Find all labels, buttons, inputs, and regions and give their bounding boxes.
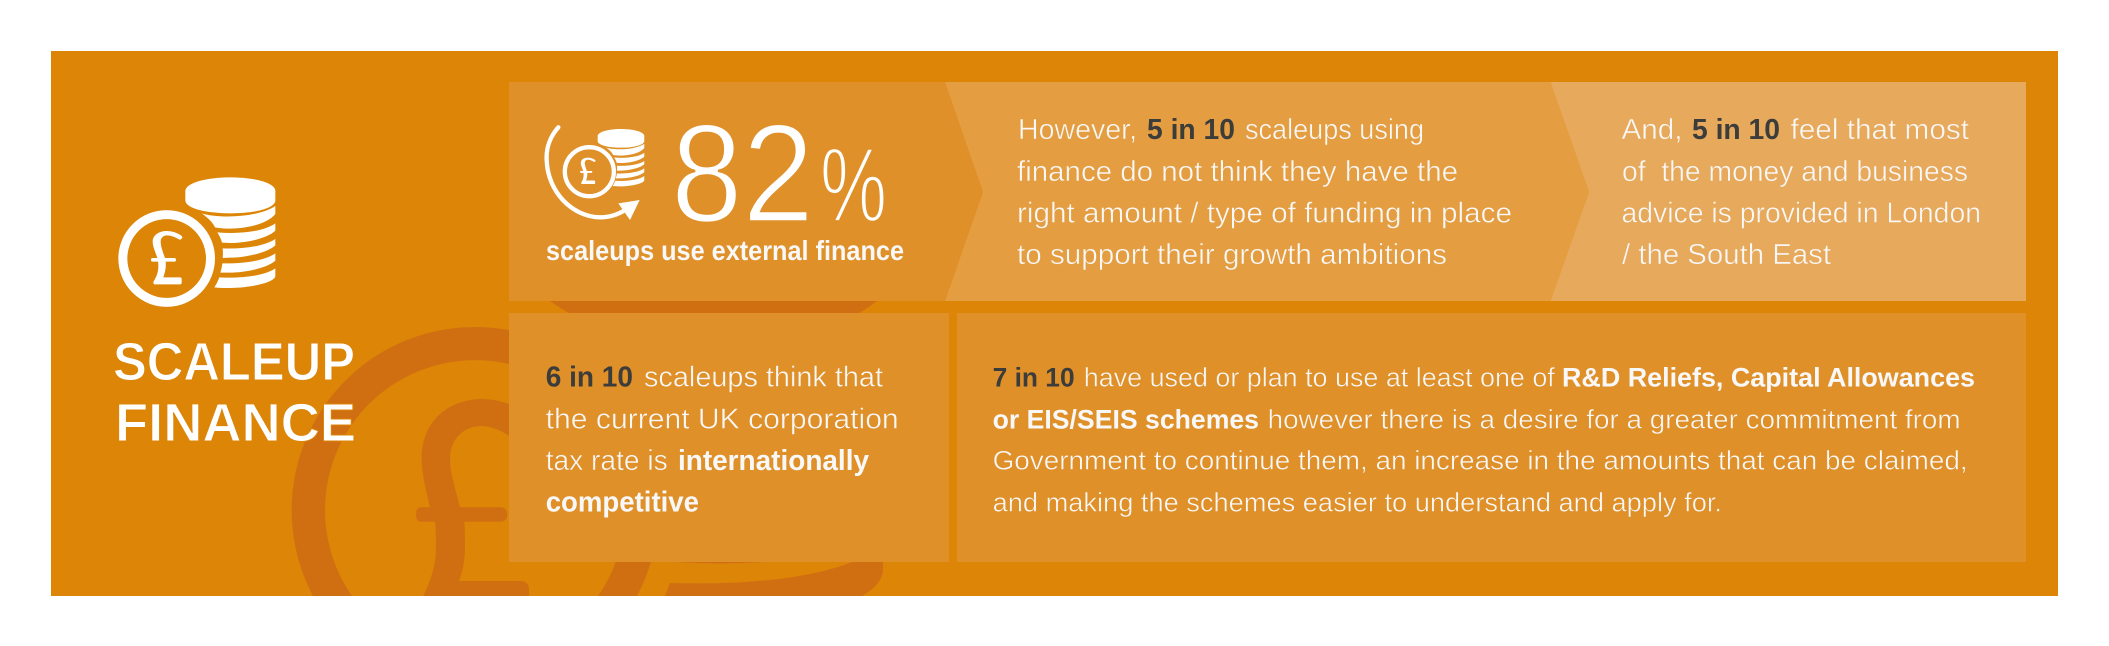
title: SCALEUP (113, 332, 355, 392)
text: reliefs and schemes: 7 in 10 (993, 363, 1075, 393)
panel: 82% external finance (509, 82, 983, 301)
text: corporation tax (546, 362, 899, 519)
text: reliefs and schemes: have used or plan to use at least one of (1084, 363, 1555, 393)
title (113, 332, 356, 453)
panel: corporation tax (509, 313, 949, 562)
text: London advice: / the South East (1622, 239, 1831, 271)
background watermark: large pound coin (292, 295, 887, 596)
text: reliefs and schemes: or EIS/SEIS schemes (993, 405, 1259, 435)
text: reliefs and schemes: however there is a desire for a greater commitment from (1268, 405, 1961, 435)
icon: pound coin and coin stack (123, 177, 275, 302)
text: funding gap (1017, 114, 1512, 271)
text: funding gap: 5 in 10 (1147, 114, 1235, 146)
text: London advice: advice is provided in London (1622, 198, 1981, 230)
text: London advice: 5 in 10 (1692, 114, 1780, 146)
text: corporation tax: scaleups think that (644, 362, 883, 394)
text: corporation tax: the current UK corporation (546, 404, 899, 436)
text: funding gap: However, (1018, 114, 1137, 146)
text: London advice: And, (1622, 114, 1682, 146)
text: corporation tax: competitive (546, 487, 699, 519)
text: reliefs and schemes: Government to continue them, an increase in the amounts that can be claimed, (993, 445, 1968, 475)
text: funding gap: scaleups using (1245, 114, 1424, 146)
statistic: 82%: 82 (671, 94, 814, 252)
text: funding gap: finance do not think they have the (1017, 156, 1458, 188)
text: funding gap: right amount / type of funding in place (1017, 198, 1512, 230)
text: funding gap: to support their growth ambitions (1017, 239, 1447, 271)
caption: scaleups use external finance: scaleups use external finance (546, 235, 904, 266)
text: corporation tax: tax rate is (546, 445, 668, 477)
panel: London advice (1550, 82, 2026, 301)
panel: funding gap chevron (945, 82, 1589, 301)
panel: reliefs and schemes (957, 313, 2026, 562)
icon: coins with circular arrow (547, 127, 644, 220)
text: London advice (1622, 114, 1981, 271)
text: reliefs and schemes: and making the schemes easier to understand and apply for. (993, 487, 1722, 517)
text: corporation tax: 6 in 10 (546, 362, 633, 394)
statistic: 82%: % (820, 126, 887, 244)
text: London advice: feel that most (1790, 114, 1969, 146)
title: FINANCE (115, 393, 356, 453)
text: reliefs and schemes (993, 363, 1975, 517)
text: corporation tax: internationally (678, 445, 869, 477)
text: London advice: of the money and business (1622, 156, 1968, 188)
text: reliefs and schemes: R&D Reliefs, Capital Allowances (1562, 363, 1975, 393)
